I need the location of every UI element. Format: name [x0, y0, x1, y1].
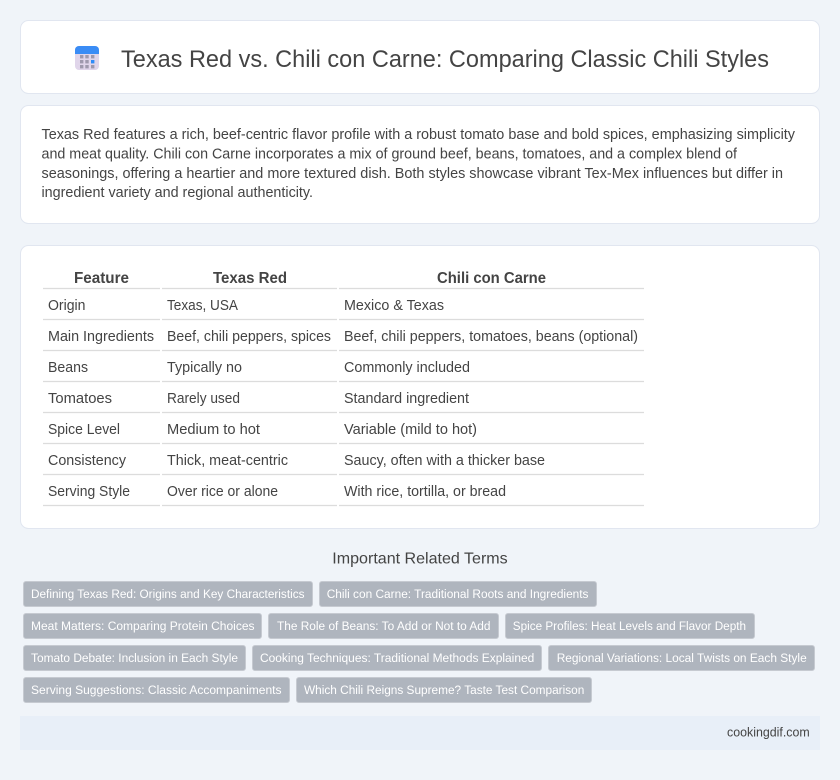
row: main ingredients: Beef, chili peppers, spices	[167, 329, 331, 345]
row: serving style: With rice, tortilla, or bread	[344, 484, 506, 500]
row: beans: Commonly included	[344, 360, 470, 376]
tag: defining texas red: Defining Texas Red: Origins and Key Characteristics	[31, 587, 304, 601]
tag: tomato debate: Tomato Debate: Inclusion in Each Style	[31, 651, 238, 665]
row: beans	[43, 360, 644, 382]
row: origin: Mexico & Texas	[344, 298, 444, 314]
row: consistency: Consistency	[48, 453, 127, 469]
row: tomatoes: Standard ingredient	[344, 391, 469, 407]
tag: chili con carne: Chili con Carne: Traditional Roots and Ingredients	[327, 587, 588, 601]
row: main ingredients	[43, 329, 644, 350]
row: serving style	[43, 484, 644, 506]
row: consistency: Saucy, often with a thicker base	[344, 453, 545, 469]
tag: serving suggestions	[24, 678, 290, 702]
related term tags	[24, 582, 814, 702]
tag: role of beans	[268, 614, 498, 638]
row: spice level	[43, 422, 644, 444]
tag: serving suggestions: Serving Suggestions: Classic Accompaniments	[31, 683, 282, 697]
panel: description	[20, 106, 820, 224]
row: origin	[43, 298, 644, 320]
row: consistency	[43, 453, 644, 474]
description text: and meat quality. Chili con Carne incorporates a mix of ground beef, beans, tomatoes, and a complex blend of	[42, 146, 738, 162]
title: Texas Red vs. Chili con Carne: Comparing Classic Chili Styles	[121, 46, 769, 73]
header panel	[20, 20, 820, 94]
row: origin: Origin	[48, 298, 86, 314]
row: main ingredients: Beef, chili peppers, tomatoes, beans (optional)	[344, 329, 638, 345]
row: tomatoes	[43, 391, 644, 412]
footer	[20, 716, 820, 750]
tag: spice profiles	[506, 614, 754, 638]
tag: cooking techniques: Cooking Techniques: Traditional Methods Explained	[260, 651, 534, 665]
footer source text: cookingdif.com	[727, 725, 810, 740]
tag: regional variations	[548, 646, 814, 670]
table header row: Texas Red	[213, 270, 287, 287]
row: tomatoes: Tomatoes	[48, 391, 112, 407]
row: spice level: Spice Level	[48, 422, 120, 438]
tag: spice profiles: Spice Profiles: Heat Levels and Flavor Depth	[513, 619, 746, 633]
description text: ingredient variety and regional authenticity.	[42, 185, 313, 201]
description text	[42, 127, 796, 201]
heading: important related terms: Important Related Terms	[332, 550, 508, 568]
tag: regional variations: Regional Variations: Local Twists on Each Style	[557, 651, 807, 665]
row: beans: Beans	[48, 360, 88, 376]
row: consistency: Thick, meat-centric	[167, 453, 288, 469]
tag: meat matters: Meat Matters: Comparing Protein Choices	[31, 619, 254, 633]
tag: tomato debate	[24, 646, 246, 670]
tag: chili con carne	[320, 582, 596, 606]
icon: calendar	[75, 46, 99, 70]
tag: role of beans: The Role of Beans: To Add or Not to Add	[277, 619, 490, 633]
tag: cooking techniques	[252, 646, 542, 670]
row: spice level: Variable (mild to hot)	[344, 422, 477, 438]
table header row: Feature	[74, 270, 129, 287]
row: serving style: Over rice or alone	[167, 484, 278, 500]
tag: meat matters	[24, 614, 262, 638]
row: origin: Texas, USA	[167, 298, 238, 314]
row: tomatoes: Rarely used	[167, 391, 240, 407]
row: beans: Typically no	[167, 360, 242, 376]
row: spice level: Medium to hot	[167, 422, 260, 438]
tag: which chili reigns supreme	[296, 678, 592, 702]
tag: which chili reigns supreme: Which Chili Reigns Supreme? Taste Test Comparison	[304, 683, 584, 697]
description text: seasonings, offering a heartier and more textured dish. Both styles showcase vibrant Tex-Mex influences but differ in	[42, 166, 783, 182]
description text: Texas Red features a rich, beef-centric flavor profile with a robust tomato base and bold spices, emphasizing simplicity	[42, 127, 796, 143]
panel: comparison table	[20, 246, 820, 528]
row: serving style: Serving Style	[48, 484, 130, 500]
row: main ingredients: Main Ingredients	[48, 329, 154, 345]
tag: defining texas red	[24, 582, 312, 606]
table header row	[43, 270, 644, 288]
table header row: Chili con Carne	[437, 270, 546, 287]
